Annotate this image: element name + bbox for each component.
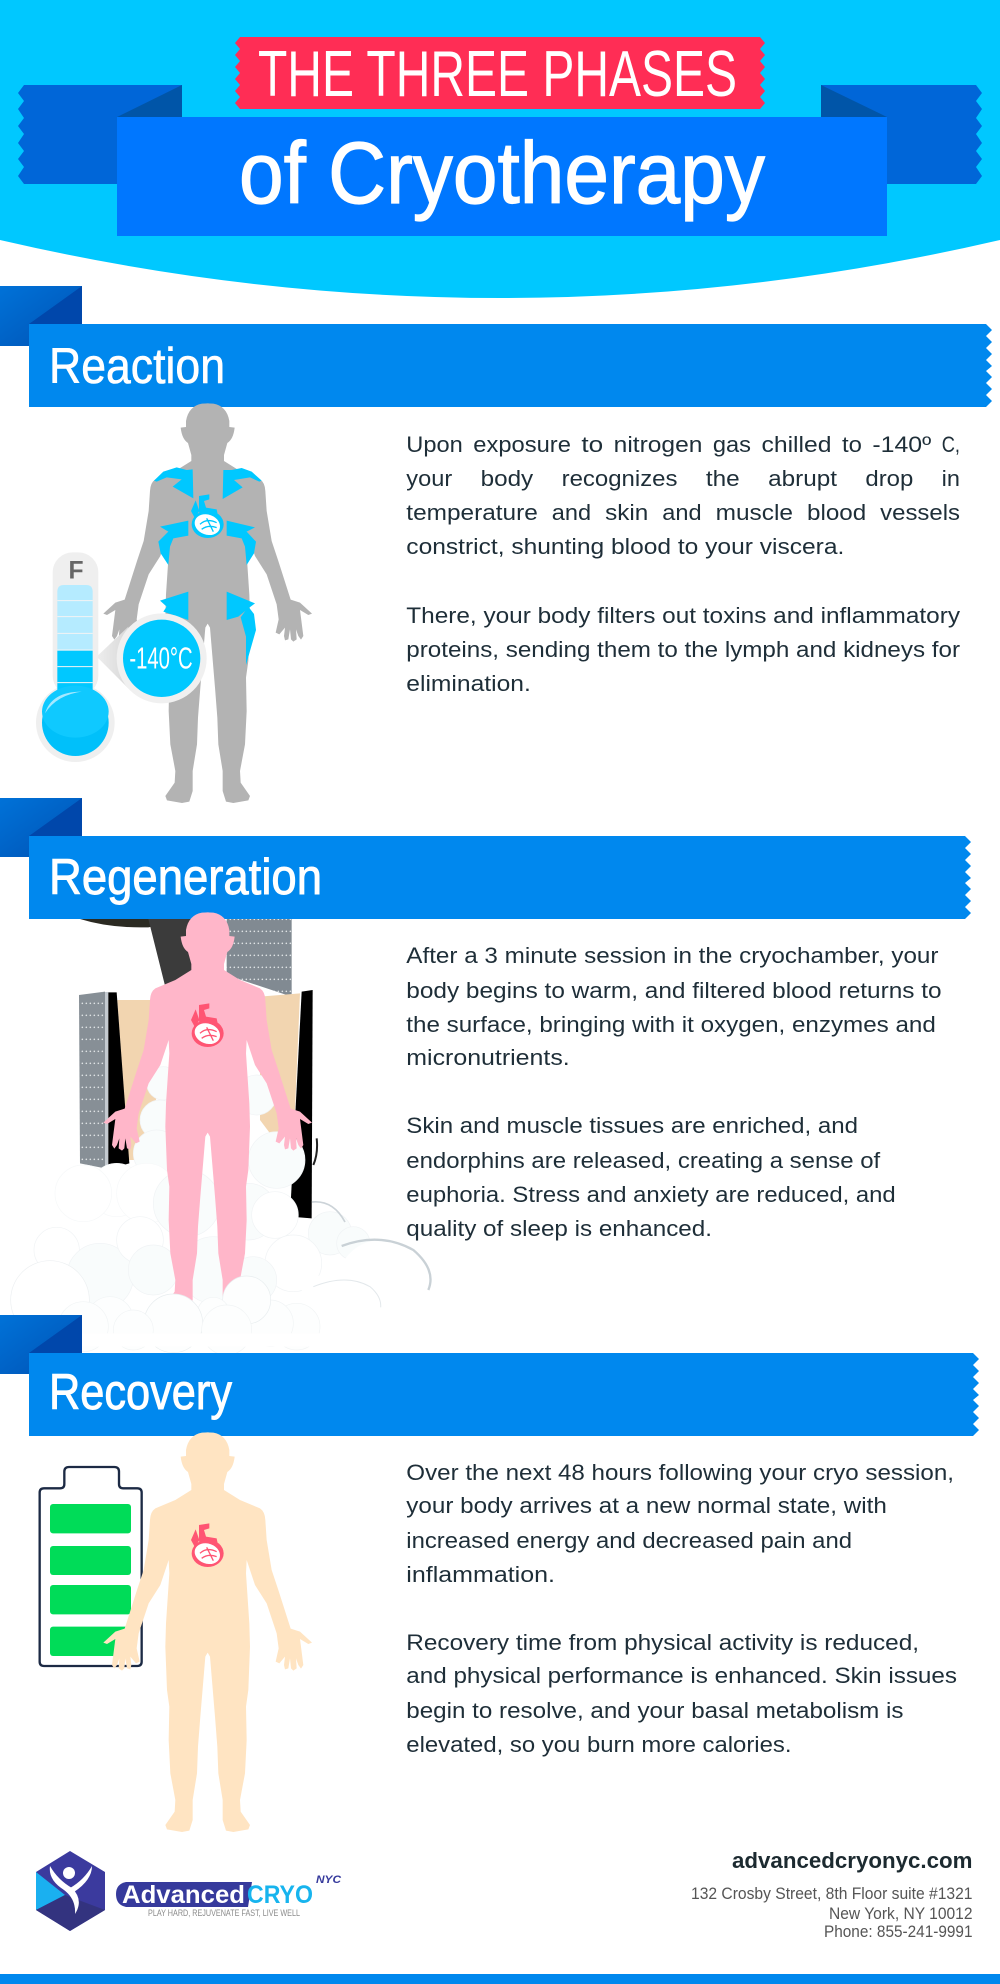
text block: reaction: your <box>406 466 453 491</box>
illustration: cryochamber <box>79 919 317 1218</box>
clouds in front of figure <box>11 1202 433 1355</box>
logo wordmark: Advanced <box>122 1881 245 1909</box>
body silhouette peach <box>103 1432 312 1832</box>
text block: reaction: C, <box>942 432 960 457</box>
text block: regeneration: After a 3 minute session in the cryochamber, your <box>406 943 939 968</box>
heading: recovery: Recovery <box>49 1364 232 1420</box>
text block: recovery: your body arrives at a new normal state, with <box>406 1493 887 1518</box>
text block: reaction: vessels <box>880 500 960 525</box>
text block: regeneration: endorphins are released, creating a sense of <box>406 1148 881 1173</box>
text block: recovery <box>406 1460 957 1757</box>
text block: reaction: recognizes <box>562 466 678 491</box>
thermometer icon <box>36 552 115 762</box>
heart red recovery <box>191 1523 224 1568</box>
blue arrows <box>154 467 262 665</box>
text block: recovery: Recovery time from physical activity is reduced, <box>406 1630 919 1655</box>
heart white-blue <box>191 494 224 539</box>
text block: reaction: to <box>581 432 603 457</box>
text block: recovery: begin to resolve, and your basal metabolism is <box>406 1698 904 1723</box>
text block: reaction: -140º <box>872 432 931 457</box>
clouds behind figure <box>34 1067 370 1310</box>
logo wordmark: PLAY HARD, REJUVENATE FAST, LIVE WELL <box>148 1908 300 1918</box>
panel: regeneration ribbon <box>0 798 971 919</box>
callout: -140C bubble: -140°C <box>129 642 193 676</box>
icon: hexagon mark <box>36 1851 105 1931</box>
text block: reaction: temperature <box>406 500 538 525</box>
title ribbon group <box>18 37 982 236</box>
heart red <box>191 1003 224 1048</box>
website: advancedcryonyc.com <box>732 1848 972 1873</box>
left back ribbon <box>18 85 182 184</box>
title line 1: THE THREE PHASES <box>258 37 737 110</box>
text block: reaction: and <box>552 500 591 525</box>
heading: reaction: Reaction <box>49 338 225 394</box>
text block: reaction: in <box>942 466 960 491</box>
footer bar <box>0 1974 1000 1984</box>
body silhouette grey <box>103 403 312 803</box>
text block: reaction: elimination. <box>406 671 531 696</box>
address: New York, NY 10012 <box>829 1905 972 1923</box>
illustration: peach body <box>103 1432 312 1832</box>
text block: reaction: to <box>842 432 862 457</box>
red title banner <box>235 37 765 109</box>
logo wordmark: CRYO <box>247 1881 313 1909</box>
illustration: grey body with cold arrows <box>103 403 312 803</box>
header background <box>0 0 1000 298</box>
address <box>691 1885 972 1941</box>
text block: reaction: There, your body filters out toxins and inflammatory <box>406 603 961 628</box>
text block: reaction: chilled <box>762 432 832 457</box>
text block: recovery: inflammation. <box>406 1562 555 1587</box>
text block: regeneration <box>406 943 942 1241</box>
panel: recovery ribbon <box>0 1315 979 1436</box>
illustration: pink body <box>103 912 312 1312</box>
text block: regeneration: euphoria. Stress and anxiety are reduced, and <box>406 1182 896 1207</box>
text block: recovery: and physical performance is enhanced. Skin issues <box>406 1663 957 1688</box>
text block: regeneration: body begins to warm, and filtered blood returns to <box>406 978 942 1003</box>
right back ribbon <box>821 85 982 184</box>
text block: reaction: Upon <box>406 432 463 457</box>
logo: Advanced Cryo NYC <box>36 1851 342 1931</box>
callout: -140C bubble <box>97 613 207 703</box>
address: Phone: 855-241-9991 <box>824 1923 972 1941</box>
heading: regeneration: Regeneration <box>49 849 322 905</box>
text block: reaction: abrupt <box>768 466 838 491</box>
panel: reaction ribbon <box>0 286 992 407</box>
text block: reaction: the <box>706 466 740 491</box>
text block: reaction: constrict, shunting blood to your viscera. <box>406 534 844 559</box>
text block: reaction: exposure <box>473 432 571 457</box>
logo wordmark <box>116 1874 342 1918</box>
text block: regeneration: micronutrients. <box>406 1045 570 1070</box>
logo wordmark: NYC <box>316 1874 342 1886</box>
text block: recovery: Over the next 48 hours following your cryo session, <box>406 1460 954 1485</box>
footer contact <box>691 1848 972 1941</box>
text block: reaction <box>406 432 961 696</box>
text block: reaction: and <box>662 500 702 525</box>
text block: reaction: drop <box>865 466 913 491</box>
text block: recovery: increased energy and decreased pain and <box>406 1528 852 1553</box>
text block: reaction: blood <box>807 500 866 525</box>
text block: regeneration: quality of sleep is enhanced. <box>406 1216 712 1241</box>
text block: regeneration: the surface, bringing with it oxygen, enzymes and <box>406 1012 936 1037</box>
icon: battery <box>40 1467 142 1666</box>
text block: recovery: elevated, so you burn more calories. <box>406 1732 792 1757</box>
thermometer icon: F <box>68 558 84 585</box>
main title banner <box>117 117 887 236</box>
text block: regeneration: Skin and muscle tissues are enriched, and <box>406 1113 858 1138</box>
address: 132 Crosby Street, 8th Floor suite #1321 <box>691 1885 972 1903</box>
text block: reaction: muscle <box>716 500 793 525</box>
text block: reaction: gas <box>713 432 751 457</box>
text block: reaction: proteins, sending them to the lymph and kidneys for <box>406 637 961 662</box>
body silhouette pink <box>103 912 312 1312</box>
text block: reaction: nitrogen <box>614 432 702 457</box>
text block: reaction: body <box>481 466 534 491</box>
text block: reaction: skin <box>605 500 648 525</box>
title line 2: of Cryotherapy <box>239 125 765 222</box>
